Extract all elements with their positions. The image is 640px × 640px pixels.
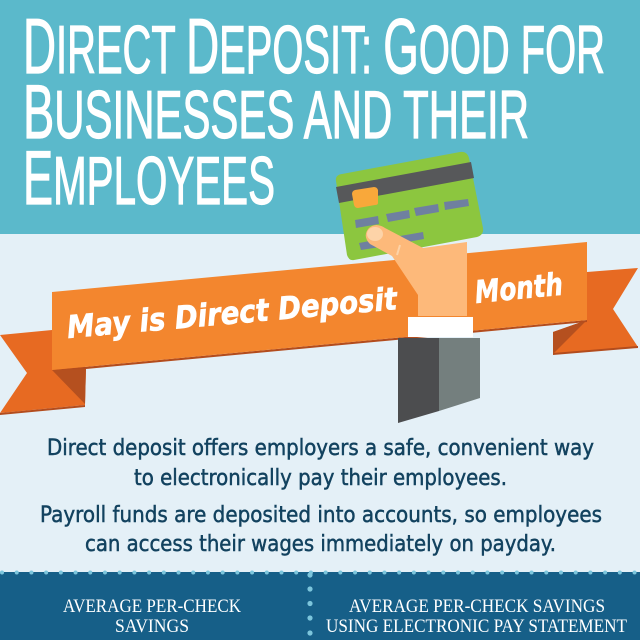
title — [23, 2, 605, 221]
dotted divider: vertical — [307, 572, 313, 636]
text block: intro paragraph: Direct deposit offers employers a safe, convenient way — [47, 436, 594, 461]
footer label: average per-check savings — [63, 596, 241, 637]
ribbon: main band — [52, 242, 587, 370]
text block: intro paragraph: to electronically pay their employees. — [134, 466, 507, 491]
ribbon text: Month: Month — [473, 267, 564, 311]
text block: intro paragraph — [47, 436, 594, 491]
footer label: average per-check savings: AVERAGE PER-CHECK — [63, 596, 241, 617]
icon: white shirt cuff — [408, 317, 473, 337]
ribbon: right tail — [553, 268, 638, 355]
dotted divider: horizontal — [2, 570, 640, 574]
ribbon: left tail — [0, 330, 86, 415]
text block: payroll paragraph — [40, 503, 602, 557]
footer label: savings using electronic pay statement: AVERAGE PER-CHECK SAVINGS — [349, 596, 605, 617]
icon: hand holding card — [366, 225, 467, 316]
footer label: average per-check savings: SAVINGS — [115, 616, 189, 637]
title: EMPLOYEES — [23, 136, 275, 221]
footer label: savings using electronic pay statement — [326, 596, 627, 637]
ribbon text: May is Direct Deposit: May is Direct Deposit — [66, 281, 399, 346]
panel: footer band — [0, 572, 640, 640]
icon: suit sleeve — [398, 338, 480, 423]
text block: payroll paragraph: can access their wages immediately on payday. — [85, 532, 556, 557]
panel: teal header background — [0, 0, 640, 234]
icon: credit card — [336, 152, 483, 260]
panel: pale body background — [0, 234, 640, 572]
